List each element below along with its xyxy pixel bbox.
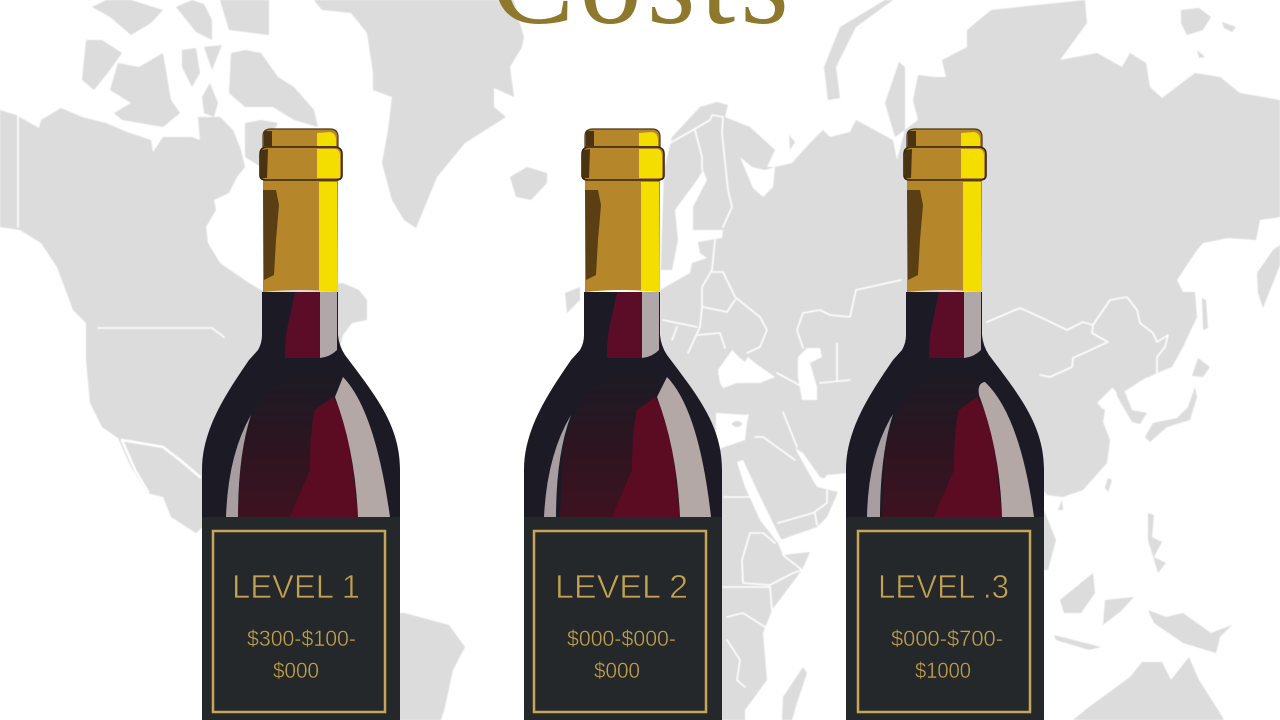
South America xyxy=(380,613,465,720)
Madagascar xyxy=(782,667,807,720)
right highlight xyxy=(657,377,711,517)
Eurasia and Africa xyxy=(660,0,1280,720)
left highlight xyxy=(867,414,893,517)
Hainan, Taiwan and India xyxy=(1040,478,1112,570)
price text: $000-$700- xyxy=(891,626,1003,651)
Persian Gulf xyxy=(795,448,828,487)
North America xyxy=(0,108,367,533)
Australia xyxy=(1073,657,1224,720)
left highlight xyxy=(226,415,251,517)
Svalbard arc and Novaya Zemlya xyxy=(824,0,905,137)
price text: $000 xyxy=(594,658,640,683)
Iceland and UK xyxy=(510,167,580,313)
level name: LEVEL .3 xyxy=(878,568,1009,605)
White Sea xyxy=(740,157,775,197)
bottle: level 1 xyxy=(202,129,400,720)
Southeast Asia islands xyxy=(1054,513,1232,653)
Japan xyxy=(1145,358,1210,442)
Baltic Sea xyxy=(660,170,723,290)
label frame xyxy=(534,531,706,712)
bottle: level 2 xyxy=(524,129,722,720)
Mediterranean xyxy=(716,413,748,450)
bottle: level 3 xyxy=(846,129,1044,720)
Arctic islands xyxy=(82,0,318,167)
right highlight xyxy=(335,377,390,517)
Kolguev xyxy=(789,135,795,150)
label frame xyxy=(858,531,1030,712)
price text: $300-$100- xyxy=(247,626,356,651)
Sakhalin xyxy=(1202,298,1208,330)
price text xyxy=(891,626,1003,683)
Caspian Sea xyxy=(798,348,822,400)
Greenland xyxy=(314,0,524,228)
price text xyxy=(247,626,356,683)
level name: LEVEL 2 xyxy=(555,568,688,605)
right highlight xyxy=(979,382,1034,517)
price text: $000 xyxy=(273,658,319,683)
Kamchatka xyxy=(1257,245,1280,308)
level name: LEVEL 1 xyxy=(232,568,360,605)
Black Sea xyxy=(718,350,775,388)
Red Sea xyxy=(737,460,783,543)
label frame xyxy=(213,531,385,712)
price text: $1000 xyxy=(915,658,971,683)
price text: $000-$000- xyxy=(567,626,676,651)
Bohai Sea xyxy=(1098,388,1117,409)
left highlight xyxy=(544,415,571,517)
Arctic Russian islands xyxy=(1181,8,1236,58)
price text xyxy=(567,626,676,683)
